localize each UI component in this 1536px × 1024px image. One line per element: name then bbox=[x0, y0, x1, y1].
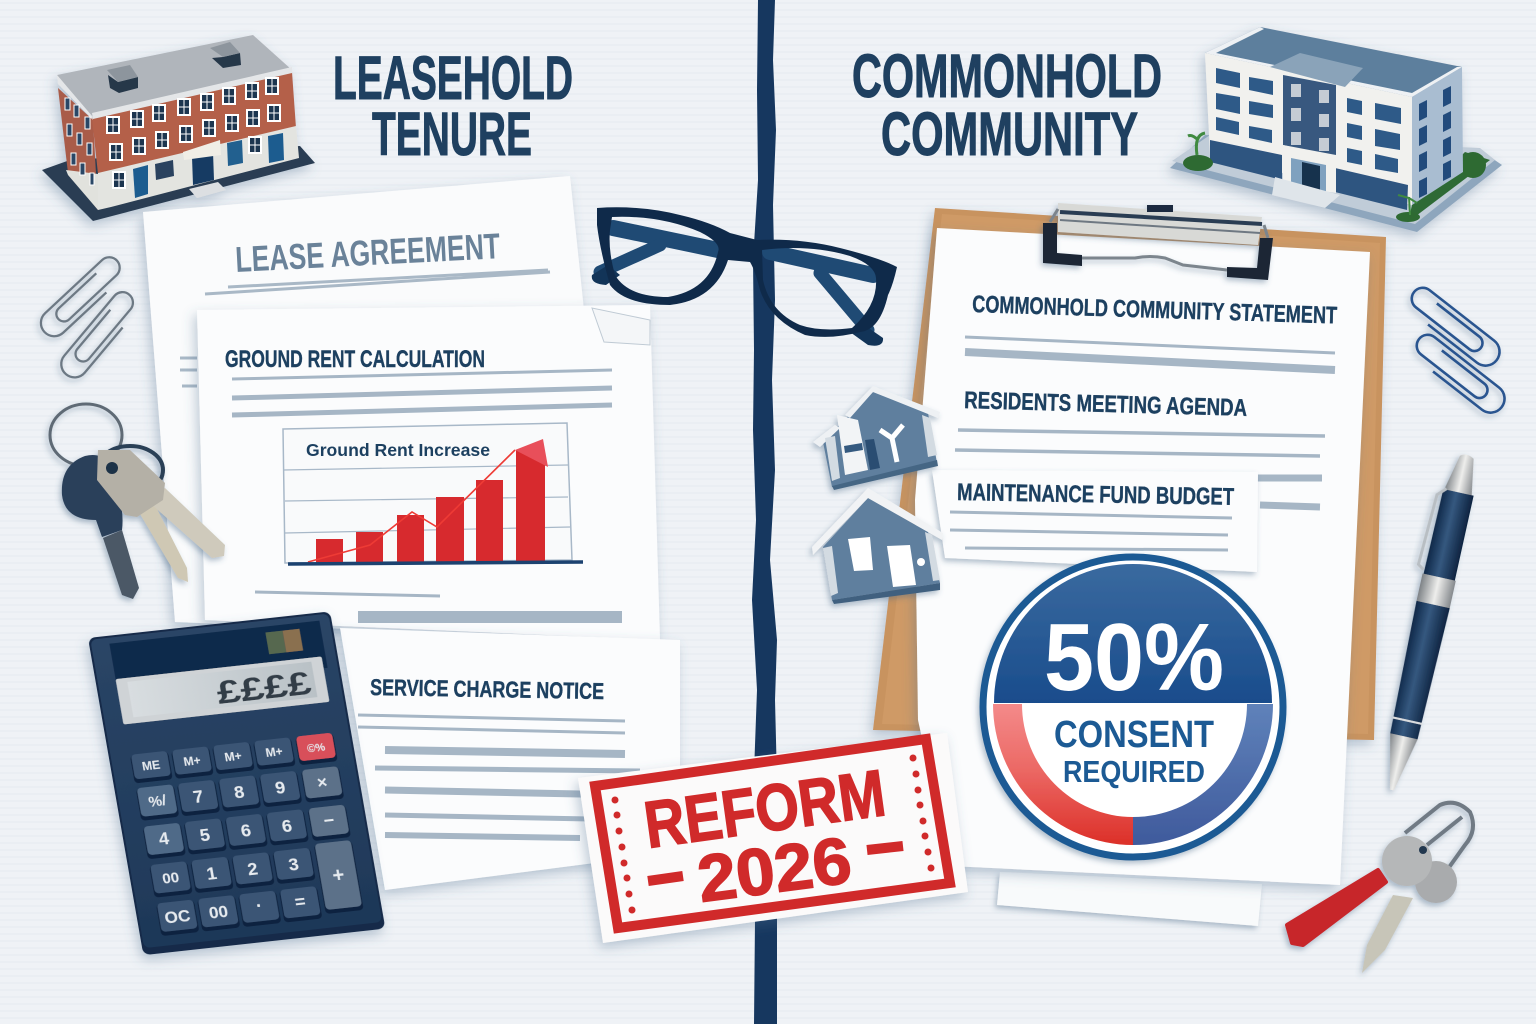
paper clips left bbox=[35, 253, 142, 383]
central blue bay bbox=[1283, 75, 1336, 155]
pen bbox=[1370, 450, 1483, 794]
house icon with door bbox=[812, 488, 943, 604]
keypad: 9 bbox=[274, 777, 287, 798]
calculator bbox=[88, 611, 385, 955]
stamp dots bbox=[612, 754, 934, 914]
seal red band bbox=[993, 704, 1133, 845]
keypad: 3 bbox=[287, 854, 300, 875]
document: service charge notice bbox=[340, 628, 680, 890]
pen body bbox=[1387, 601, 1450, 740]
front windows bbox=[106, 77, 281, 189]
keypad: 6 bbox=[280, 816, 294, 836]
keypad: + bbox=[331, 864, 346, 887]
keypad: M+ bbox=[182, 753, 202, 769]
stamp text: REFORM bbox=[640, 755, 890, 862]
lawn bbox=[1408, 152, 1490, 222]
pen tip bbox=[1378, 733, 1418, 793]
seal caption: CONSENT bbox=[1054, 714, 1214, 756]
key ring bbox=[50, 404, 122, 466]
heading: leasehold tenure: LEASEHOLD bbox=[333, 44, 573, 112]
keypad: 1 bbox=[205, 863, 218, 884]
keypad: 2 bbox=[246, 859, 259, 879]
document: lease agreement bbox=[143, 176, 620, 640]
document: ground rent calculation bbox=[197, 305, 660, 640]
keypad: 8 bbox=[233, 782, 246, 802]
ground rent title: GROUND RENT CALCULATION bbox=[225, 346, 485, 373]
clipboard clip bbox=[1043, 203, 1273, 280]
dark header bbox=[109, 621, 328, 691]
seal: 50% consent required: REQUIRED bbox=[1063, 754, 1205, 789]
lease lines bbox=[180, 270, 550, 386]
keys left bbox=[50, 404, 225, 599]
keypad: 00 bbox=[161, 869, 181, 888]
roof bbox=[1205, 27, 1462, 97]
key blade bbox=[1362, 895, 1413, 973]
seal top half bbox=[994, 564, 1272, 703]
heading: commonhold community: COMMUNITY bbox=[881, 100, 1138, 168]
dormers bbox=[108, 75, 138, 93]
heading: leasehold tenure bbox=[333, 44, 573, 168]
bars bbox=[316, 450, 545, 563]
document: maintenance fund budget bbox=[932, 470, 1258, 572]
centre divider bbox=[752, 0, 777, 1024]
clipboard board bbox=[873, 208, 1386, 740]
front wall bbox=[1205, 53, 1412, 205]
residents meeting title: RESIDENTS MEETING AGENDA bbox=[964, 387, 1247, 422]
heading: commonhold community: COMMONHOLD bbox=[852, 42, 1162, 110]
bar chart: ground rent increase bbox=[283, 423, 583, 564]
dark key bbox=[62, 455, 139, 599]
plants bbox=[1183, 133, 1420, 222]
entrance bbox=[1283, 145, 1336, 193]
keypad: = bbox=[293, 891, 307, 912]
front wall brick bbox=[92, 72, 296, 174]
maintenance title: MAINTENANCE FUND BUDGET bbox=[957, 479, 1235, 511]
seal value: 50% bbox=[1044, 604, 1224, 711]
arm tips bbox=[592, 265, 883, 346]
agenda lines bbox=[955, 430, 1325, 507]
paper clips right bbox=[1404, 283, 1510, 418]
text lines bbox=[358, 715, 640, 838]
stamp text: 2026 bbox=[693, 822, 856, 916]
front wall ground floor bbox=[98, 126, 299, 210]
pen bands bbox=[1393, 716, 1422, 725]
stamp: reform 2026 bbox=[578, 733, 968, 943]
clip bar bbox=[1058, 203, 1262, 245]
keypad: · bbox=[254, 895, 264, 915]
keypad: 00 bbox=[207, 902, 230, 923]
lease title: LEASE AGREEMENT bbox=[234, 225, 501, 280]
heading: commonhold community bbox=[852, 42, 1162, 168]
calculator body bbox=[88, 611, 385, 955]
keys right with red fob bbox=[1287, 803, 1473, 973]
keypad: OC bbox=[163, 906, 192, 928]
roof bbox=[57, 35, 292, 116]
trend line bbox=[308, 450, 515, 562]
side windows bbox=[1419, 86, 1451, 198]
glasses bbox=[592, 207, 897, 346]
stamp text bbox=[640, 755, 890, 916]
display bbox=[116, 656, 329, 724]
clip wire bbox=[1050, 209, 1268, 270]
arrow head bbox=[515, 439, 548, 467]
right building: commonhold block bbox=[1170, 27, 1502, 232]
chart title: Ground Rent Increase bbox=[306, 440, 490, 460]
keypad: − bbox=[322, 810, 336, 831]
arms seen through lenses bbox=[600, 228, 873, 330]
text lines bbox=[232, 370, 622, 617]
lower sheet under clipboard paper bbox=[997, 872, 1262, 926]
side wall bbox=[1412, 67, 1463, 205]
keypad: M+ bbox=[264, 744, 284, 760]
pen clip bbox=[1418, 486, 1447, 571]
seal: 50% consent required bbox=[983, 557, 1283, 857]
maintenance lines bbox=[950, 512, 1232, 550]
keypad: × bbox=[316, 773, 329, 792]
doors bbox=[133, 165, 148, 198]
keypad: ME bbox=[141, 758, 161, 773]
building base bbox=[42, 146, 315, 221]
clip clamps bbox=[1043, 223, 1082, 266]
keypad: ©% bbox=[306, 742, 326, 755]
service charge title: SERVICE CHARGE NOTICE bbox=[370, 674, 604, 704]
ground floor bbox=[1210, 140, 1282, 180]
house icon with check bbox=[813, 386, 940, 490]
keypad: 6 bbox=[239, 820, 253, 841]
silver key blade back bbox=[140, 505, 188, 582]
keypad: M+ bbox=[223, 749, 243, 764]
base plinth bbox=[1170, 135, 1502, 232]
windows bbox=[1216, 68, 1401, 173]
side wall bbox=[58, 88, 98, 210]
statement lines bbox=[965, 337, 1335, 370]
roof canopy bbox=[1270, 53, 1363, 87]
keypad: 7 bbox=[192, 786, 205, 807]
statement title: COMMONHOLD COMMUNITY STATEMENT bbox=[972, 291, 1338, 329]
left building: leasehold block bbox=[42, 35, 315, 221]
keypad: %/ bbox=[147, 792, 168, 811]
key heads bbox=[1415, 861, 1457, 903]
clipboard paper bbox=[915, 228, 1370, 885]
display: ££££ bbox=[214, 665, 314, 711]
solar panel bbox=[265, 629, 303, 654]
bay windows bbox=[1291, 84, 1329, 151]
seal blue band bbox=[1133, 704, 1273, 845]
red fob bbox=[1287, 870, 1386, 945]
keypad bbox=[130, 733, 364, 936]
keypad: 4 bbox=[157, 828, 171, 849]
frame bbox=[597, 207, 897, 337]
side windows bbox=[65, 98, 94, 185]
keypad: 5 bbox=[198, 825, 212, 845]
ring bbox=[1405, 803, 1473, 873]
stamp dashes bbox=[648, 846, 903, 881]
silver key bbox=[97, 450, 225, 558]
heading: leasehold tenure: TENURE bbox=[372, 100, 532, 168]
pen cap bbox=[1444, 452, 1480, 495]
check mark bbox=[880, 425, 903, 462]
